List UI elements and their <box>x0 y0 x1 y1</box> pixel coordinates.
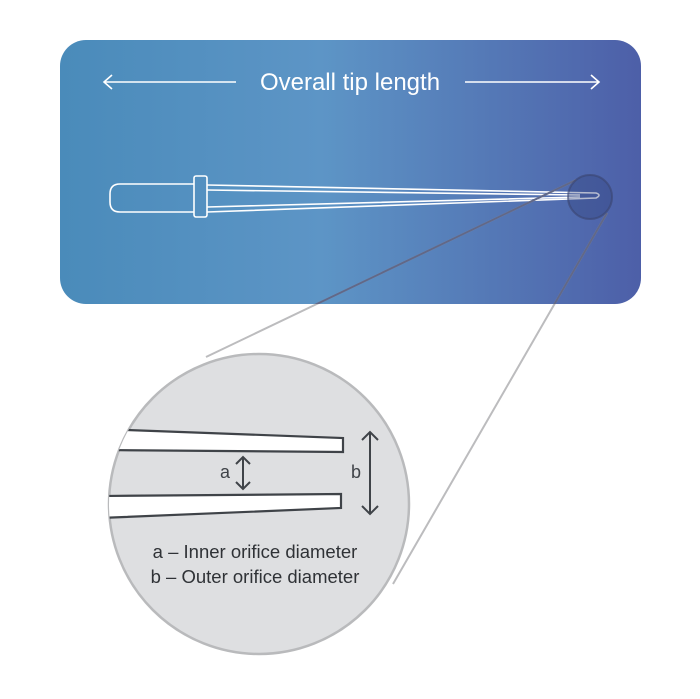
panel: zoom circle <box>100 354 409 654</box>
arrow: left <box>104 75 236 89</box>
icon: magnifier small circle <box>568 175 612 219</box>
zoom connector lines <box>206 180 607 584</box>
arrow: right <box>465 75 599 89</box>
panel: blue header <box>60 40 641 304</box>
heading: overall tip length <box>104 69 599 96</box>
legend text: a – Inner orifice diameter <box>153 541 357 562</box>
tip walls <box>100 429 343 518</box>
pipette tip drawing <box>110 176 599 217</box>
legend text <box>151 541 359 587</box>
panel: zoom circle: b <box>351 462 361 482</box>
legend text: b – Outer orifice diameter <box>151 566 359 587</box>
arrow: a inner diameter <box>236 457 250 489</box>
arrow: b outer diameter <box>362 432 378 514</box>
panel: zoom circle: a <box>220 462 231 482</box>
heading: overall tip length: Overall tip length <box>260 69 440 96</box>
